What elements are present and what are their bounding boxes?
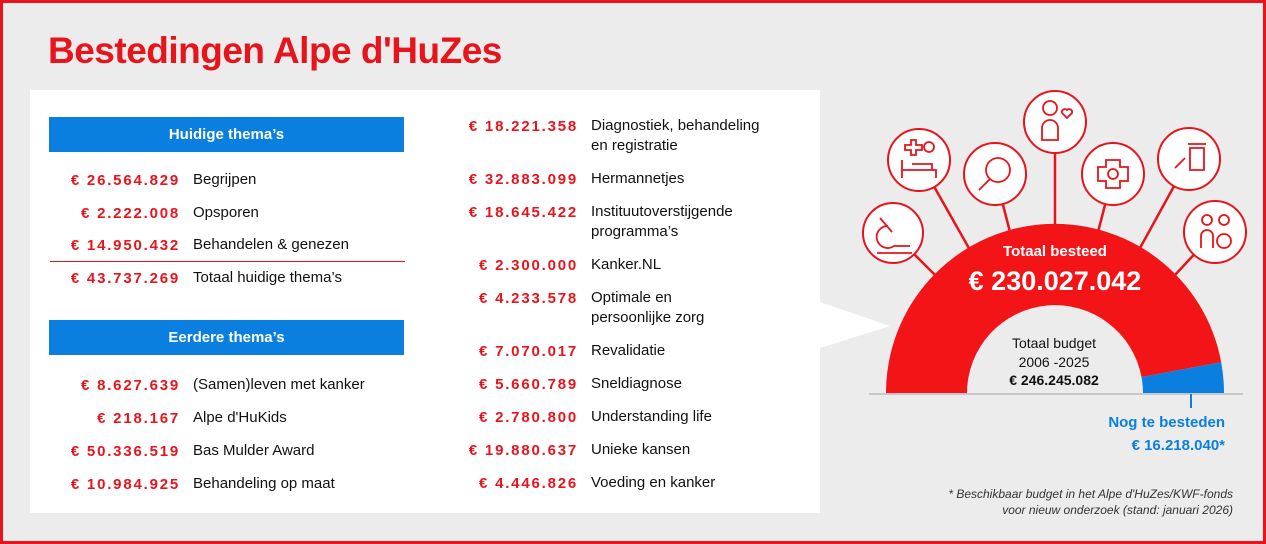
list: middle column: Revalidatie — [591, 342, 665, 359]
list: middle column: Diagnostiek, behandeling — [591, 117, 759, 134]
callout: nog te besteden: Nog te besteden — [1108, 414, 1225, 431]
list: middle column: Sneldiagnose — [591, 375, 682, 392]
heading: eerdere thema's — [49, 320, 404, 355]
list: middle column: € 18.221.358 — [469, 118, 578, 135]
footnote: * Beschikbaar budget in het Alpe d'HuZes/KWF-fonds — [948, 487, 1233, 501]
list: eerdere thema's: € 10.984.925 — [71, 476, 180, 493]
list: eerdere thema's: Bas Mulder Award — [193, 442, 314, 459]
chart: semicircle budget — [862, 90, 1247, 408]
list: eerdere thema's: € 8.627.639 — [81, 377, 180, 394]
callout: nog te besteden: € 16.218.040* — [1132, 437, 1225, 454]
heading: huidige thema's: Huidige thema’s — [169, 126, 284, 143]
callout: nog te besteden — [1108, 414, 1225, 454]
chart: semicircle budget: € 230.027.042 — [969, 266, 1141, 296]
heading: eerdere thema's: Eerdere thema’s — [168, 329, 285, 346]
list: eerdere thema's: (Samen)leven met kanker — [193, 376, 365, 393]
list: middle column: Kanker.NL — [591, 256, 661, 273]
list: middle column: Hermannetjes — [591, 170, 684, 187]
list: huidige thema's: € 43.737.269 — [71, 270, 180, 287]
list: huidige thema's: Begrijpen — [193, 171, 256, 188]
chart: semicircle budget: € 246.245.082 — [1009, 372, 1099, 388]
icons — [863, 91, 1246, 263]
list: huidige thema's: Behandelen & genezen — [193, 236, 349, 253]
list: eerdere thema's — [71, 376, 365, 493]
chart: semicircle budget: 2006 -2025 — [1019, 354, 1090, 370]
text: totaal besteed: Totaal besteed — [1003, 243, 1107, 260]
heading: huidige thema's — [49, 117, 404, 152]
list: huidige thema's: € 26.564.829 — [71, 172, 180, 189]
list: middle column: € 5.660.789 — [479, 376, 578, 393]
list: middle column: € 7.070.017 — [479, 343, 578, 360]
list: middle column: € 2.780.800 — [479, 409, 578, 426]
list: middle column: € 19.880.637 — [469, 442, 578, 459]
list: eerdere thema's: € 218.167 — [97, 410, 180, 427]
list: middle column: Understanding life — [591, 408, 712, 425]
list: middle column — [469, 117, 759, 492]
text: totaal budget: Totaal budget — [1012, 335, 1096, 351]
list: middle column: Instituutoverstijgende — [591, 203, 733, 220]
footnote: voor nieuw onderzoek (stand: januari 2026) — [1002, 503, 1233, 517]
list: huidige thema's: € 14.950.432 — [71, 237, 180, 254]
list: huidige thema's: € 2.222.008 — [81, 205, 180, 222]
list: eerdere thema's: Behandeling op maat — [193, 475, 335, 492]
list: middle column: programma’s — [591, 223, 678, 240]
footnote — [948, 487, 1233, 517]
list: middle column: Optimale en — [591, 289, 672, 306]
list: middle column: en registratie — [591, 137, 678, 154]
list: middle column: € 18.645.422 — [469, 204, 578, 221]
list: huidige thema's: Opsporen — [193, 204, 259, 221]
list: huidige thema's — [50, 171, 405, 287]
list: middle column: persoonlijke zorg — [591, 309, 704, 326]
list: middle column: € 32.883.099 — [469, 171, 578, 188]
list: middle column: € 4.233.578 — [479, 290, 578, 307]
list: middle column: Unieke kansen — [591, 441, 690, 458]
list: eerdere thema's: Alpe d'HuKids — [193, 409, 287, 426]
title: Bestedingen Alpe d'HuZes — [48, 30, 502, 71]
list: middle column: € 4.446.826 — [479, 475, 578, 492]
list: middle column: Voeding en kanker — [591, 474, 715, 491]
list: huidige thema's: Totaal huidige thema’s — [193, 269, 342, 286]
list: eerdere thema's: € 50.336.519 — [71, 443, 180, 460]
list: middle column: € 2.300.000 — [479, 257, 578, 274]
